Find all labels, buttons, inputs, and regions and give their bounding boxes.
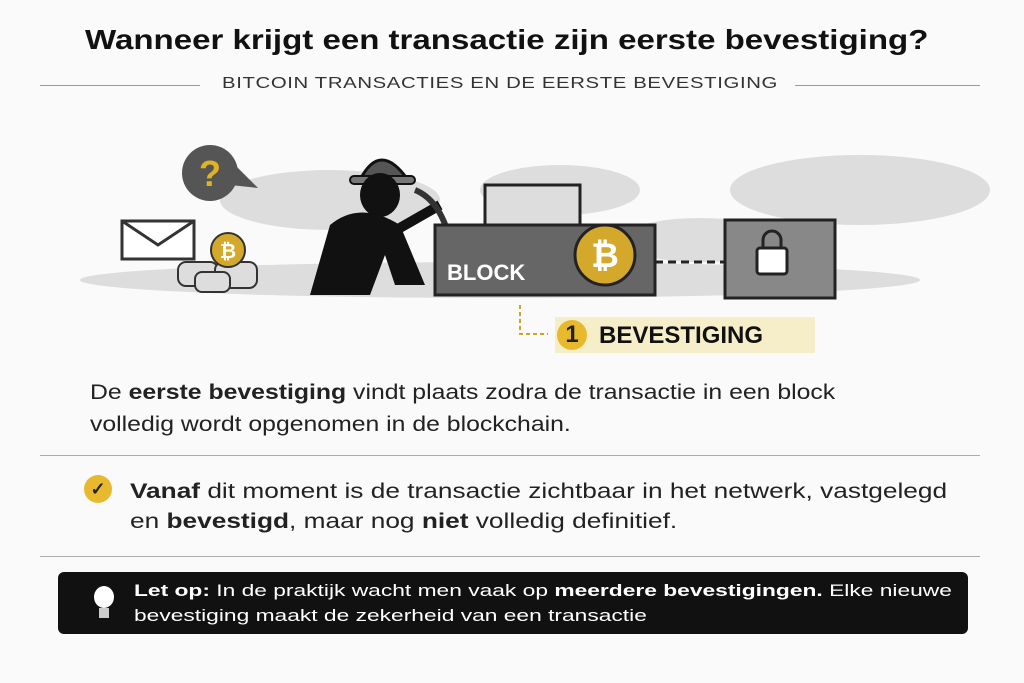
callout: let op: Let op: In de praktijk wacht men vaak op meerdere bevestigingen. Elke nieuwe [134,581,952,600]
icon: miner [310,160,450,295]
subtitle: BITCOIN TRANSACTIES EN DE EERSTE BEVESTIGING [222,75,778,92]
title: Wanneer krijgt een transactie zijn eerste bevestiging? [85,24,928,55]
icon: check [84,475,112,503]
badge: 1 bevestiging [555,317,815,353]
text block: eerste bevestiging: De eerste bevestiging vindt plaats zodra de transactie in een block [90,381,835,404]
illustration [80,145,990,335]
icon: speech bubble question [182,145,258,201]
text block: vanaf: en bevestigd, maar nog niet volledig definitief. [130,510,677,533]
icon: lightbulb [94,586,114,618]
icon: speech bubble question: ? [199,153,221,194]
text block: eerste bevestiging [90,381,836,436]
badge: 1 bevestiging: 1 [565,321,579,348]
icon: check: ✓ [90,479,106,499]
icon: envelope [122,221,194,259]
text block: vanaf [130,480,947,533]
callout: let op [58,572,968,634]
icon: locked block [725,220,835,298]
icon: coins: ₿ [220,241,236,263]
callout: let op: bevestiging maakt de zekerheid van een transactie [134,606,647,625]
icon: block: BLOCK [447,260,525,285]
icon: coins [178,233,257,292]
icon: block [435,185,655,295]
text block: vanaf: Vanaf dit moment is de transactie zichtbaar in het netwerk, vastgelegd [130,480,947,503]
arrow [520,305,548,334]
badge: 1 bevestiging: BEVESTIGING [599,322,763,349]
text block: eerste bevestiging: volledig wordt opgenomen in de blockchain. [90,413,571,436]
icon: block: ₿ [591,237,619,275]
